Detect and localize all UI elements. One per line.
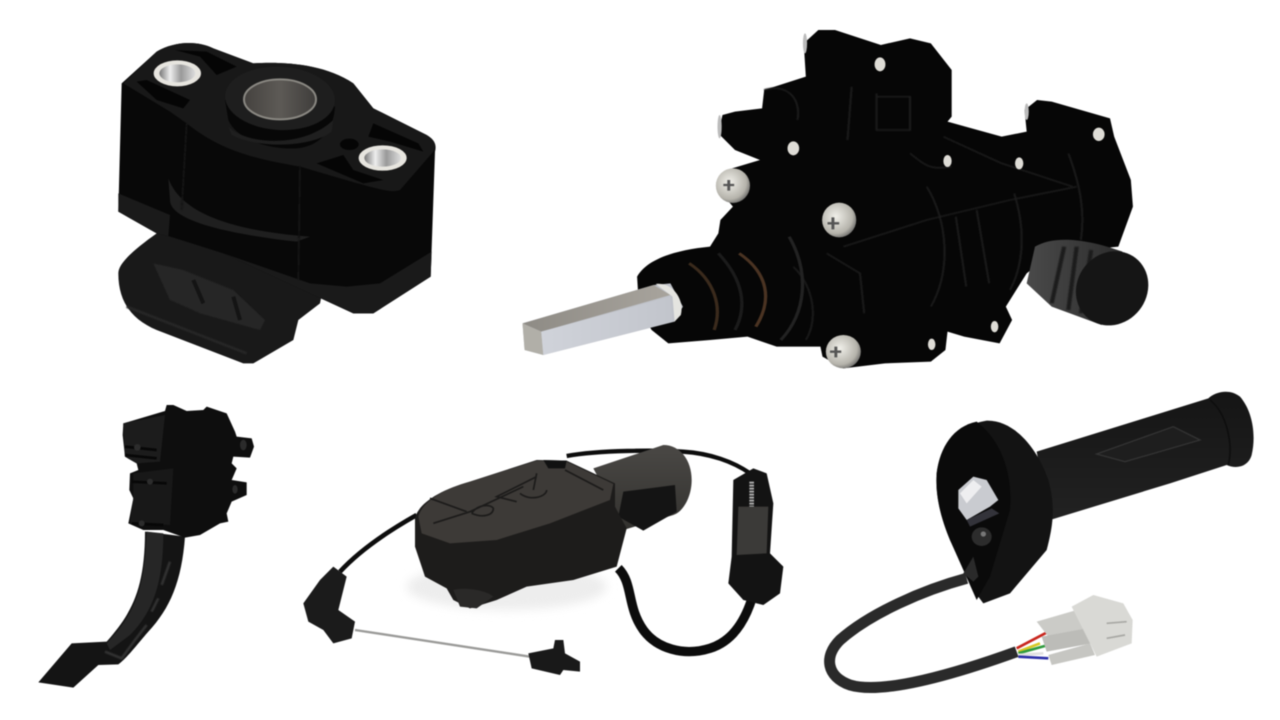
product: accelerator pedal (38, 405, 254, 688)
product: throttle position sensor (118, 43, 436, 363)
sensor lower band (118, 193, 432, 313)
sensor top face (123, 43, 435, 191)
bent arm (303, 567, 355, 643)
product: rotary actuator with shaft (523, 30, 1155, 368)
sensor body (118, 43, 436, 313)
sensor arc groove (168, 178, 310, 242)
actuator mounting pins (718, 33, 1105, 350)
motor can (593, 445, 692, 530)
sensor connector (118, 227, 323, 363)
top cable (567, 451, 750, 473)
sensor bushing right (359, 145, 407, 171)
grip sleeve (1037, 392, 1254, 520)
actuator rubber cap (1027, 240, 1155, 330)
motor connector (618, 485, 677, 531)
grip housing (936, 421, 1053, 603)
pedal housing (123, 405, 254, 538)
actuator housing (637, 30, 1133, 368)
actuator square shaft (523, 283, 683, 355)
sensor bushing left (154, 60, 201, 86)
actuator bellows (689, 237, 803, 340)
cable to arm (340, 515, 417, 572)
grip cable (830, 578, 1017, 688)
sheath with label (728, 468, 783, 605)
sensor center collar (223, 64, 337, 149)
grip metal bore (958, 477, 998, 520)
rod end clip (528, 640, 580, 675)
actuator housing ribs (764, 87, 1082, 340)
colored wires (1017, 632, 1048, 658)
white connector (1037, 595, 1133, 665)
sensor recesses (137, 50, 423, 183)
steel rod (355, 630, 530, 657)
motor shadow (407, 563, 607, 610)
gearbox (415, 460, 627, 608)
lower looping cable (618, 568, 757, 652)
product: throttle grip (830, 392, 1254, 688)
product: motor actuator with cables (303, 445, 783, 675)
pedal arm (38, 532, 185, 688)
actuator screws (716, 168, 861, 368)
